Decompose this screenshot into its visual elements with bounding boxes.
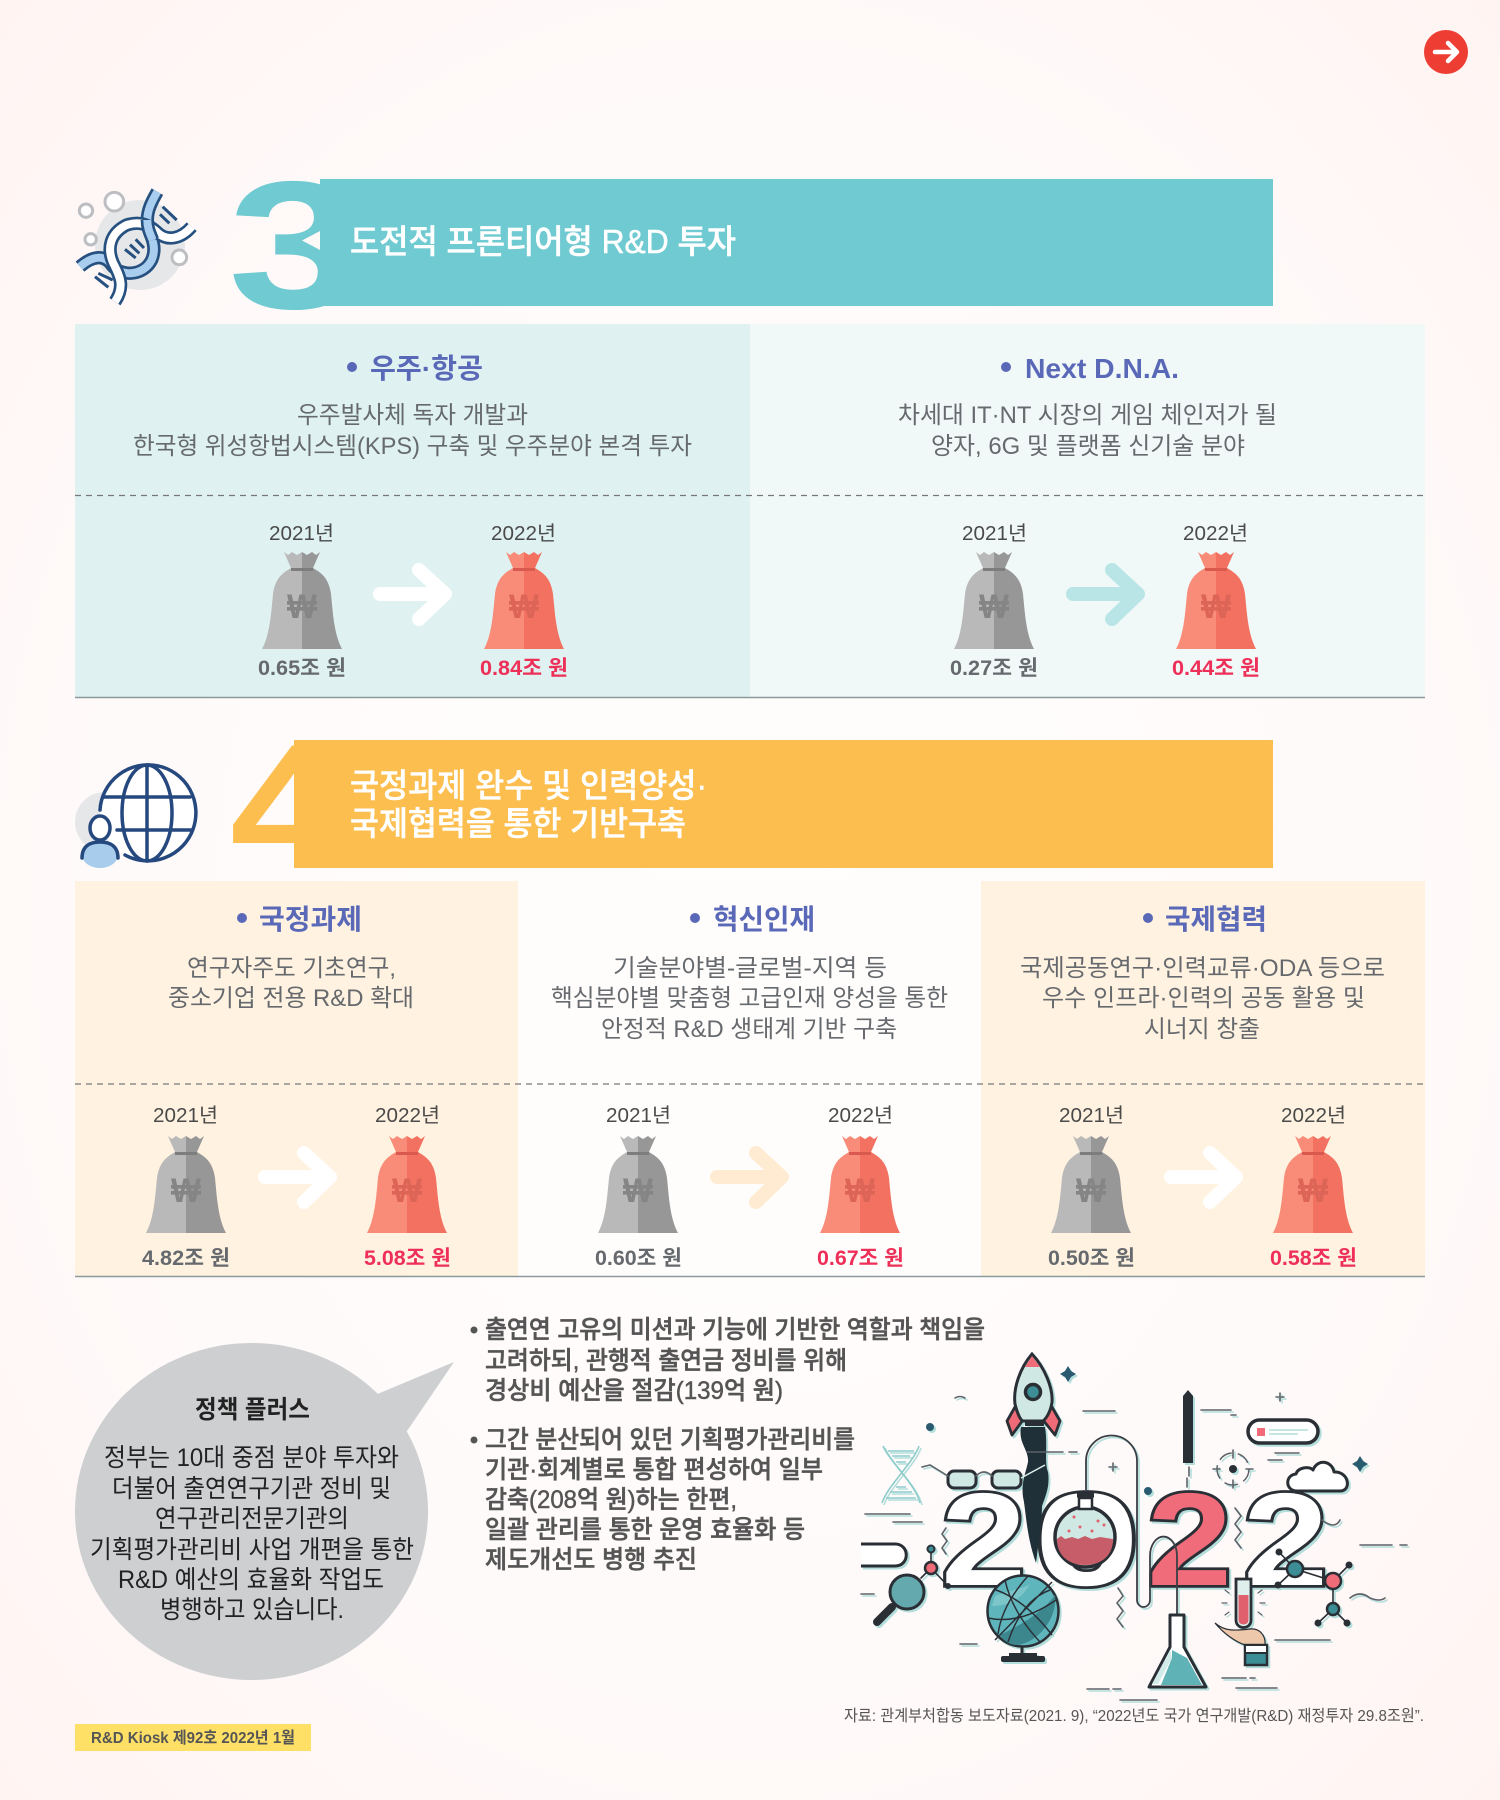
callout: policy plus speech bubble: R&D 예산의 효율화 작업도 xyxy=(118,1566,384,1594)
heading bar: section 3: 도전적 프론티어형 R&D 투자 xyxy=(350,223,736,260)
budget 2022: 0.67조 원 xyxy=(817,1247,904,1270)
budget 2021: 2021년 xyxy=(962,522,1027,545)
budget 2021: ₩ xyxy=(979,588,1010,626)
budget 2021: 2021년 xyxy=(606,1104,671,1127)
callout: policy plus speech bubble: 연구관리전문기관의 xyxy=(155,1505,349,1533)
callout: policy plus speech bubble xyxy=(75,1343,454,1680)
description: national agenda: 중소기업 전용 R&D 확대 xyxy=(168,985,414,1012)
illustration: 2022 science and technology xyxy=(861,1354,1407,1700)
budget 2022: ₩ xyxy=(1298,1172,1329,1210)
panel: space and aviation xyxy=(75,324,750,697)
digit 2: 2 xyxy=(1147,1467,1232,1614)
budget 2022: 5.08조 원 xyxy=(364,1247,451,1270)
stars and dots xyxy=(926,1366,1368,1495)
bullet text: restructured operating costs: 고려하되, 관행적 출연금 정비를 위해 xyxy=(485,1347,847,1375)
description: innovative talent xyxy=(551,955,948,1043)
budget 2022: 2022년 xyxy=(828,1104,893,1127)
budget 2022: ₩ xyxy=(509,588,540,626)
callout: policy plus speech bubble: 정부는 10대 중점 분야 투자와 xyxy=(104,1444,399,1472)
budget 2021: 2021년 xyxy=(269,522,334,545)
erlenmeyer flask xyxy=(1149,1615,1206,1687)
budget 2021: ₩ xyxy=(623,1172,654,1210)
budget 2022: 2022년 xyxy=(1183,522,1248,545)
test tube and hand xyxy=(1215,1579,1267,1665)
budget 2021 xyxy=(142,1104,230,1270)
issue badge: R&D Kiosk 제92호 2022년 1월 xyxy=(91,1729,295,1747)
description: space and aviation xyxy=(133,402,692,460)
digit 2: 2 xyxy=(941,1467,1026,1614)
pill bar xyxy=(1248,1420,1318,1443)
bullet text: planning and evaluation costs: 일괄 관리를 통한 운영 효율화 등 xyxy=(485,1516,805,1544)
cloud xyxy=(1288,1462,1347,1491)
bullet heading: international cooperation: 국제협력 xyxy=(1165,904,1267,935)
bullet text: planning and evaluation costs: 감축(208억 원)하는 한편, xyxy=(485,1486,737,1514)
arrow xyxy=(380,570,445,619)
budget 2021: ₩ xyxy=(1076,1172,1107,1210)
callout: policy plus speech bubble: 정책 플러스 xyxy=(195,1396,310,1424)
description: international cooperation: 시너지 창출 xyxy=(1144,1016,1260,1043)
bullet text: restructured operating costs: 경상비 예산을 절감(139억 원) xyxy=(485,1377,783,1405)
description: innovative talent: 안정적 R&D 생태계 기반 구축 xyxy=(601,1016,897,1043)
budget 2022: 0.84조 원 xyxy=(480,657,568,680)
molecule left xyxy=(921,1546,951,1589)
budget 2021 xyxy=(258,522,346,680)
glasses xyxy=(922,1465,1045,1488)
budget 2021: 2021년 xyxy=(1059,1104,1124,1127)
DNA xyxy=(882,1446,920,1503)
world globe xyxy=(988,1576,1058,1662)
budget 2021 xyxy=(595,1104,682,1270)
issue badge xyxy=(75,1724,311,1751)
budget 2021 xyxy=(950,522,1038,680)
digit 0: 0 xyxy=(1034,1466,1140,1613)
bullet text: planning and evaluation costs: 제도개선도 병행 추진 xyxy=(485,1546,697,1574)
icon: globe and person xyxy=(75,765,196,868)
connecting tube xyxy=(1086,1436,1177,1615)
decorative dashes and squiggles xyxy=(861,1393,1407,1700)
digit 2: 2 xyxy=(1243,1467,1328,1614)
description: Next D.N.A. xyxy=(898,402,1277,460)
budget 2021: 0.27조 원 xyxy=(950,657,1038,680)
numeral 3: 3 xyxy=(228,143,360,347)
bullet text: restructured operating costs xyxy=(470,1316,985,1405)
panel: Next D.N.A. xyxy=(750,324,1425,697)
budget 2021: 4.82조 원 xyxy=(142,1247,230,1270)
rocket xyxy=(1007,1354,1060,1563)
budget 2021 xyxy=(1048,1104,1135,1270)
budget 2022: 2022년 xyxy=(491,522,556,545)
icon: DNA helix xyxy=(79,192,192,302)
left pill xyxy=(861,1544,906,1566)
bullet text: restructured operating costs: 출연연 고유의 미션과 기능에 기반한 역할과 책임을 xyxy=(485,1316,985,1344)
bullet text: planning and evaluation costs xyxy=(470,1426,855,1574)
bullet text: planning and evaluation costs: 그간 분산되어 있던 기획평가관리비를 xyxy=(485,1426,855,1454)
arrow xyxy=(1171,1153,1236,1202)
bullet heading: space and aviation: 우주·항공 xyxy=(370,353,483,384)
numeral 4: 4 xyxy=(230,708,343,906)
budget 2021: ₩ xyxy=(171,1172,202,1210)
target xyxy=(1213,1450,1253,1488)
budget 2022 xyxy=(364,1104,451,1270)
arrow xyxy=(717,1153,782,1202)
heading bar: section 3 xyxy=(302,179,1273,306)
description: space and aviation: 한국형 위성항법시스템(KPS) 구축 및 우주분야 본격 투자 xyxy=(133,433,692,460)
budget 2021: 0.65조 원 xyxy=(258,657,346,680)
description: international cooperation: 우수 인프라·인력의 공동 활용 및 xyxy=(1042,985,1365,1012)
panel: international cooperation xyxy=(981,881,1425,1276)
next page arrow button xyxy=(1424,30,1468,74)
description: national agenda xyxy=(168,955,414,1012)
description: space and aviation: 우주발사체 독자 개발과 xyxy=(297,402,528,429)
budget 2021: 0.60조 원 xyxy=(595,1247,682,1270)
budget 2021: ₩ xyxy=(287,588,318,626)
source note: 자료: 관계부처합동 보도자료(2021. 9), “2022년도 국가 연구개발(R&D) 재정투자 29.8조원”. xyxy=(844,1707,1424,1725)
description: innovative talent: 기술분야별-글로벌-지역 등 xyxy=(613,955,887,982)
callout: policy plus speech bubble: 기획평가관리비 사업 개편을 통한 xyxy=(90,1536,414,1564)
budget 2022 xyxy=(1172,522,1260,680)
budget 2021: 0.50조 원 xyxy=(1048,1247,1135,1270)
description: Next D.N.A.: 차세대 IT·NT 시장의 게임 체인저가 될 xyxy=(898,402,1277,429)
callout: policy plus speech bubble: 병행하고 있습니다. xyxy=(160,1596,344,1624)
heading bar: section 4: 국정과제 완수 및 인력양성· xyxy=(350,767,707,804)
budget 2022 xyxy=(817,1104,904,1270)
bullet heading: Next D.N.A.: Next D.N.A. xyxy=(1025,353,1179,384)
panel: national agenda xyxy=(75,881,518,1276)
arrow xyxy=(1073,570,1138,619)
bullet heading: innovative talent: 혁신인재 xyxy=(713,904,815,935)
description: international cooperation: 국제공동연구·인력교류·ODA 등으로 xyxy=(1020,955,1385,982)
budget 2021: 2021년 xyxy=(153,1104,218,1127)
heading bar: section 4: 국제협력을 통한 기반구축 xyxy=(350,805,686,842)
magnifier xyxy=(877,1575,924,1622)
budget 2022 xyxy=(1270,1104,1357,1270)
callout: policy plus speech bubble: 더불어 출연연구기관 정비 및 xyxy=(112,1475,391,1503)
arrow xyxy=(265,1153,330,1202)
description: international cooperation xyxy=(1020,955,1385,1043)
budget 2022: 2022년 xyxy=(375,1104,440,1127)
bullet heading: national agenda: 국정과제 xyxy=(259,904,362,935)
molecule right xyxy=(1274,1548,1352,1626)
budget 2022: 0.58조 원 xyxy=(1270,1247,1357,1270)
budget 2022: ₩ xyxy=(1201,588,1232,626)
round flask xyxy=(1055,1495,1115,1567)
budget 2022: 2022년 xyxy=(1281,1104,1346,1127)
budget 2022 xyxy=(480,522,568,680)
budget 2022: 0.44조 원 xyxy=(1172,657,1260,680)
budget 2022: ₩ xyxy=(392,1172,423,1210)
description: innovative talent: 핵심분야별 맞춤형 고급인재 양성을 통한 xyxy=(551,985,948,1012)
budget 2022: ₩ xyxy=(845,1172,876,1210)
heading bar: section 4 xyxy=(294,740,1273,868)
bullet text: planning and evaluation costs: 기관·회계별로 통합 편성하여 일부 xyxy=(485,1456,823,1484)
description: national agenda: 연구자주도 기초연구, xyxy=(187,955,396,982)
pen xyxy=(1183,1390,1193,1487)
description: Next D.N.A.: 양자, 6G 및 플랫폼 신기술 분야 xyxy=(931,433,1245,460)
panel: innovative talent xyxy=(518,881,981,1276)
